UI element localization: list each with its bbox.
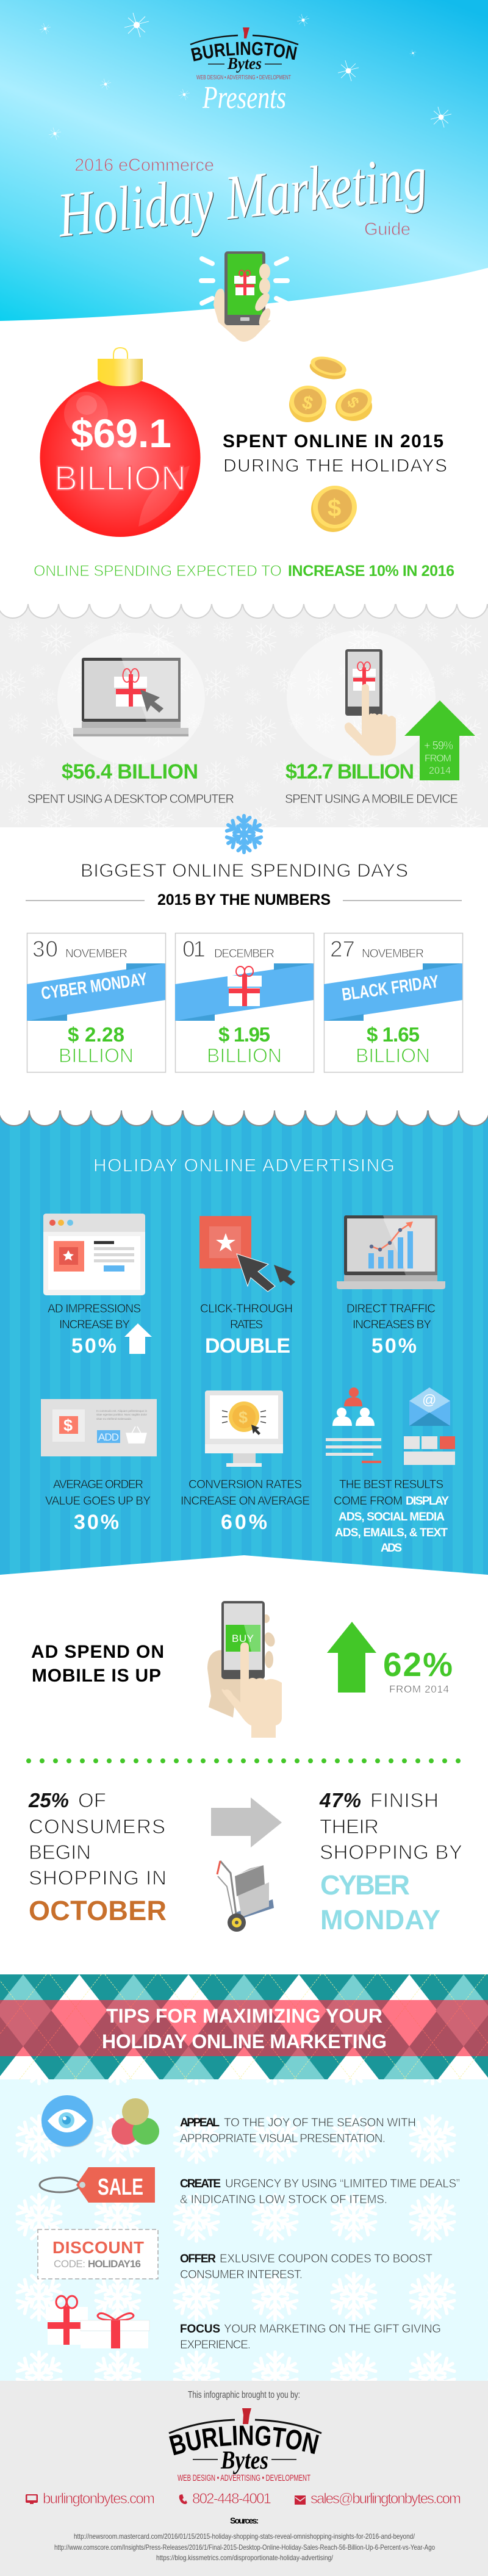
icon: green arrow 62% — [327, 1622, 453, 1695]
text: click-through rates: DOUBLE — [205, 1334, 290, 1358]
text: sources — [54, 2516, 435, 2562]
panel: footer — [0, 2381, 488, 2576]
text: offer: EXLUSIVE COUPON CODES TO BOOST — [220, 2253, 432, 2265]
text: ad spend on mobile — [31, 1642, 164, 1686]
text: 47% finish shopping by cyber monday: THEIR — [320, 1815, 379, 1838]
panel: december 1 card: DECEMBER — [214, 948, 274, 960]
text: click-through rates: CLICK-THROUGH — [200, 1303, 293, 1315]
text: direct traffic: INCREASES BY — [353, 1319, 431, 1331]
logo: Burlington Bytes large: BURLINGTON — [169, 2426, 319, 2455]
text: spent online in 2015 — [223, 431, 447, 476]
icon: sparkling stars — [40, 13, 451, 140]
icon: eye and colour circles — [41, 2095, 159, 2147]
text: Guide: Guide — [364, 220, 411, 239]
panel: december 1 card: $ 1.95 — [218, 1023, 270, 1046]
text: 47% finish shopping by cyber monday: MONDAY — [320, 1904, 440, 1935]
logo: Burlington Bytes: BURLINGTON — [191, 41, 297, 61]
panel: header — [0, 0, 488, 342]
icon: discount coupon: DISCOUNT — [52, 2238, 144, 2257]
text: brought to you by: This infographic brought to you by: — [188, 2390, 300, 2400]
icon: phone buy button in hands — [207, 1601, 282, 1738]
panel: cyber monday card: NOVEMBER — [65, 948, 127, 960]
icon: laptop chart — [337, 1215, 445, 1289]
text: best results — [334, 1478, 449, 1555]
text: $12.7 billion mobile: $12.7 BILLION — [285, 760, 414, 783]
text: direct traffic: 50% — [371, 1334, 417, 1358]
text: best results: COME FROM — [334, 1495, 403, 1508]
icon: laptop with gift — [73, 658, 188, 736]
text: appeal: APPROPRIATE VISUAL PRESENTATION. — [180, 2132, 386, 2145]
icon: product add to basket: In commodo est. Aliquam pellentesque in — [96, 1409, 147, 1412]
text: 25% of consumers begin shopping in october: OF — [78, 1789, 106, 1811]
text: create — [180, 2178, 460, 2206]
icon: green arrow +59% from 2014: FROM — [425, 754, 451, 764]
panel: cyber monday card: 30 — [32, 937, 58, 962]
icon: browser ad — [43, 1214, 145, 1295]
icon: gold coins: $ — [328, 495, 341, 522]
icon: blue snowflake — [225, 816, 263, 852]
icon: green arrow +59% from 2014 — [404, 700, 475, 780]
panel: cyber monday card: CYBER MONDAY — [40, 970, 148, 1004]
text: 47% finish shopping by cyber monday: CYBER — [320, 1869, 410, 1901]
text: focus: FOCUS — [180, 2323, 220, 2336]
text: appeal: APPEAL — [180, 2117, 220, 2129]
icon: product add to basket: vitae eu eleifend malesuada. — [96, 1417, 132, 1420]
panel: tips section — [0, 1974, 488, 2381]
text: average order value — [45, 1478, 151, 1534]
panel: argyle banner — [0, 1974, 488, 2118]
text: ad spend on mobile: AD SPEND ON — [31, 1642, 164, 1662]
panel: december 1 card — [175, 934, 314, 1073]
icon: green arrow +59% from 2014: + 59% — [424, 739, 453, 752]
icon: phone with gift in hand — [201, 251, 287, 342]
text: BILLION: BILLION — [54, 459, 186, 498]
text: Presents: Presents — [202, 81, 286, 115]
text: average order value: AVERAGE ORDER — [53, 1478, 143, 1491]
icon: product add to basket: $ — [63, 1416, 73, 1434]
icon: hand truck with boxes — [217, 1861, 274, 1932]
panel: cyber monday card: $ 2.28 — [68, 1023, 124, 1046]
panel: black friday card: BILLION — [356, 1045, 430, 1067]
text: conversion rates — [181, 1478, 310, 1534]
text: best results: DISPLAY — [406, 1495, 449, 1508]
text: spent online in 2015: DURING THE HOLIDAYS — [223, 456, 447, 476]
panel: black friday card — [324, 934, 462, 1073]
text: online spending expected: INCREASE 10% IN 2016 — [288, 563, 454, 580]
text: 47% finish shopping by cyber monday: SHOPPING BY — [320, 1841, 462, 1863]
text: 25% of consumers begin shopping in october — [28, 1789, 167, 1926]
icon: click-through cursor — [199, 1216, 295, 1292]
panel: cyber monday card: BILLION — [59, 1045, 134, 1067]
icon: discount coupon — [38, 2229, 158, 2279]
text: 25% of consumers begin shopping in october: OCTOBER — [29, 1895, 167, 1926]
text: $56.4 billion desktop: $56.4 BILLION — [62, 760, 198, 783]
text: 2016 eCommerce: 2016 eCommerce — [74, 156, 214, 175]
text: best results: ADS — [381, 1542, 402, 1555]
text: $12.7 billion mobile — [285, 760, 458, 806]
text: best results: ADS, SOCIAL MEDIA — [339, 1511, 445, 1524]
text: appeal: TO THE JOY OF THE SEASON WITH — [224, 2117, 416, 2129]
text: conversion rates: 60% — [221, 1511, 267, 1534]
icon: monitor with coin — [205, 1391, 283, 1467]
text: offer: OFFER — [180, 2253, 216, 2265]
text: ad spend on mobile: MOBILE IS UP — [32, 1666, 161, 1686]
icon: channels people email grid — [326, 1387, 455, 1465]
text: 47% finish shopping by cyber monday: 47% — [319, 1789, 361, 1811]
icon: discount coupon: HOLIDAY16 — [88, 2258, 141, 2270]
panel: black friday card: 27 — [330, 937, 355, 962]
icon: gifts — [46, 2296, 149, 2348]
icon: phone buy button in hands: BUY — [232, 1633, 254, 1644]
logo: Burlington Bytes: Bytes — [227, 54, 262, 73]
text: 47% finish shopping by cyber monday — [319, 1789, 462, 1935]
text: click-through rates: RATES — [230, 1319, 263, 1331]
heading: 2015 by the numbers: 2015 BY THE NUMBERS — [157, 891, 331, 908]
text: online spending expected — [34, 563, 454, 580]
text: direct traffic — [346, 1303, 436, 1358]
text: best results: THE BEST RESULTS — [339, 1478, 443, 1491]
text: ad impressions: INCREASE BY — [59, 1319, 130, 1331]
text: 25% of consumers begin shopping in october: BEGIN — [29, 1841, 91, 1863]
panel: black friday card: NOVEMBER — [362, 948, 424, 960]
text: 25% of consumers begin shopping in october: 25% — [28, 1789, 69, 1811]
text: direct traffic: DIRECT TRAFFIC — [346, 1303, 436, 1315]
panel: black friday card: $ 1.65 — [367, 1023, 420, 1046]
text: ad impressions — [48, 1303, 152, 1358]
text: focus: YOUR MARKETING ON THE GIFT GIVING — [224, 2323, 441, 2336]
panel: black friday card: BLACK FRIDAY — [341, 972, 440, 1005]
text: offer: CONSUMER INTEREST. — [180, 2268, 303, 2281]
text: $56.4 billion desktop — [27, 760, 234, 806]
text: 25% of consumers begin shopping in october: CONSUMERS — [29, 1815, 165, 1838]
contact: email: sales@burlingtonbytes.com — [310, 2491, 461, 2507]
icon: gold coins — [289, 353, 376, 532]
icon: green arrow 62%: 62% — [383, 1646, 453, 1683]
text: sources: http://newsroom.mastercard.com/2016/01/15/2015-holiday-shopping-stats-reveal-omnishopping-insights-for-2016-and-beyond/ — [74, 2532, 415, 2541]
logo: Burlington Bytes: WEB DESIGN • ADVERTISING • DEVELOPMENT — [196, 74, 291, 81]
contact: phone: 802-448-4001 — [192, 2491, 271, 2507]
text: offer — [180, 2253, 432, 2281]
text: sources: https://blog.kissmetrics.com/disproportionate-holiday-advertising/ — [156, 2553, 334, 2562]
text: appeal — [180, 2117, 416, 2145]
icon: discount coupon: CODE: — [54, 2258, 85, 2270]
text: average order value: 30% — [74, 1511, 119, 1534]
text: focus: EXPERIENCE. — [180, 2339, 251, 2351]
panel: holiday online advertising — [0, 1092, 488, 1575]
icon: green arrow 62%: FROM 2014 — [389, 1683, 449, 1695]
logo: Burlington Bytes large — [168, 2408, 322, 2483]
text: best results: ADS, EMAILS, & TEXT — [335, 1527, 448, 1539]
text: 47% finish shopping by cyber monday: FINISH — [370, 1789, 439, 1811]
logo: Burlington Bytes large: WEB DESIGN • ADVERTISING • DEVELOPMENT — [178, 2473, 310, 2483]
icon: green arrow +59% from 2014: 2014 — [429, 766, 451, 776]
text: spent online in 2015: SPENT ONLINE IN 2015 — [223, 431, 443, 452]
icon: gift — [228, 966, 262, 1006]
icon: sale tag: SALE — [98, 2175, 143, 2200]
icon: phone with tap gesture — [345, 649, 396, 756]
white curve — [0, 268, 488, 323]
icon: product add to basket: ADD — [98, 1431, 119, 1443]
panel: december 1 card: 01 — [182, 937, 206, 962]
heading: tips: TIPS FOR MAXIMIZING YOUR — [106, 2005, 382, 2027]
panel: desktop vs mobile spending — [0, 586, 488, 827]
text: 25% of consumers begin shopping in october: SHOPPING IN — [29, 1866, 167, 1889]
heading: tips: HOLIDAY ONLINE MARKETING — [102, 2031, 387, 2053]
icon: red ornament with $69.1 billion — [40, 348, 200, 537]
text: average order value: VALUE GOES UP BY — [45, 1495, 151, 1508]
text: sources: Sources: — [230, 2516, 259, 2525]
icon: product add to basket: vitae egestas porttitor. Nunc sagittis dolor — [96, 1413, 148, 1416]
logo: Burlington Bytes large: Bytes — [220, 2447, 268, 2475]
text: create: URGENCY BY USING “LIMITED TIME DEALS” — [225, 2178, 460, 2190]
heading: tips — [102, 2005, 387, 2053]
panel: december 1 card: BILLION — [207, 1045, 282, 1067]
icon: gold coins: $ — [300, 392, 315, 414]
text: conversion rates: CONVERSION RATES — [188, 1478, 302, 1491]
text: $12.7 billion mobile: SPENT USING A MOBILE DEVICE — [285, 793, 458, 806]
icon: gold coins: $ — [343, 393, 364, 412]
icon: channels people email grid: @ — [422, 1392, 436, 1408]
icon: monitor with coin: $ — [239, 1408, 248, 1427]
text: create: & INDICATING LOW STOCK OF ITEMS. — [180, 2193, 387, 2206]
text: create: CREATE — [180, 2178, 221, 2190]
text: $69.1: $69.1 — [71, 411, 171, 456]
heading: biggest online spending days: BIGGEST ONLINE SPENDING DAYS — [81, 860, 408, 881]
text: click-through rates — [200, 1303, 293, 1358]
text: ad impressions: 50% — [71, 1334, 117, 1358]
text: $56.4 billion desktop: SPENT USING A DESKTOP COMPUTER — [27, 793, 234, 806]
text: online spending expected: ONLINE SPENDING EXPECTED TO — [34, 563, 282, 580]
text: focus — [180, 2323, 441, 2351]
icon: sale tag — [40, 2167, 155, 2203]
text: conversion rates: INCREASE ON AVERAGE — [181, 1495, 310, 1508]
heading: HOLIDAY ONLINE ADVERTISING — [93, 1156, 395, 1176]
panel: cyber monday card — [27, 934, 166, 1073]
arrow: grey right — [211, 1797, 282, 1847]
contact: website: burlingtonbytes.com — [43, 2491, 155, 2507]
icon: product add to basket — [41, 1399, 157, 1456]
logo: Burlington Bytes — [190, 27, 299, 81]
text: ad impressions: AD IMPRESSIONS — [48, 1303, 141, 1315]
